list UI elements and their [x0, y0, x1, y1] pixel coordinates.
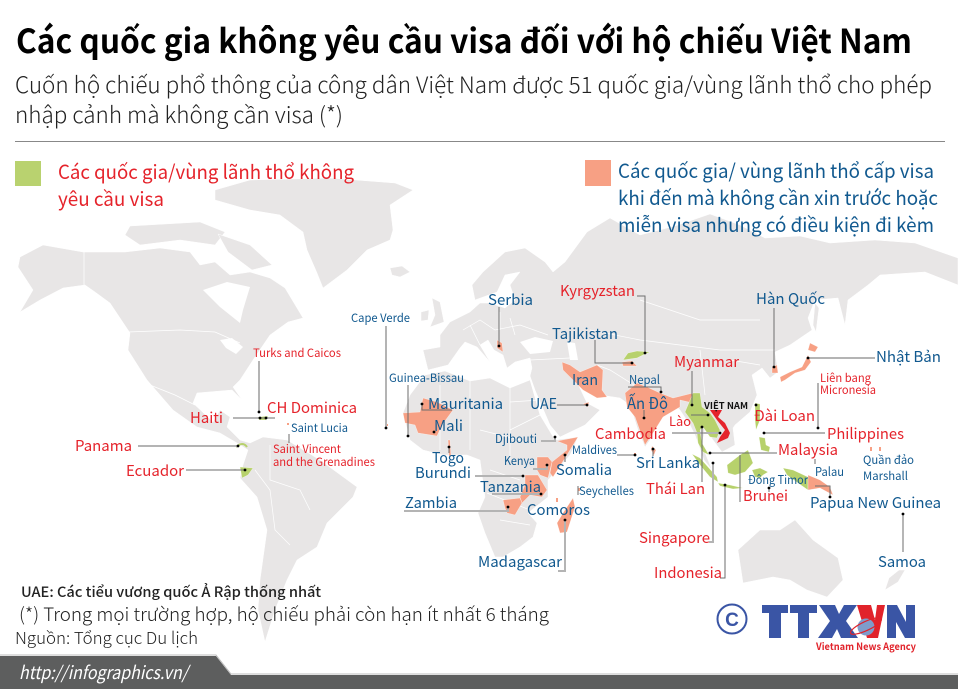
label: Burundi: Burundi: [415, 462, 471, 483]
land: madagascar: [557, 498, 575, 533]
country: south korea: [772, 365, 778, 373]
label: Turks and Caicos: Turks and Caicos: [253, 345, 341, 361]
label: Myanmar: Myanmar: [674, 351, 739, 372]
label: Seychelles: Seychelles: [579, 483, 634, 499]
label: Madagascar: Madagascar: [478, 551, 562, 572]
logo: copyright: C: [725, 610, 739, 631]
label: Togo: Togo: [432, 447, 464, 468]
legend text green: [58, 156, 354, 212]
land: sakhalin: [813, 303, 819, 332]
land: eurasia: [423, 214, 958, 470]
label: Tanzania: Tanzania: [480, 476, 541, 497]
country: sulawesi: [752, 468, 768, 478]
label: Somalia: Somalia: [556, 459, 612, 480]
legend text green: Các quốc gia/vùng lãnh thổ không: [58, 156, 354, 185]
label: Indonesia: Indonesia: [654, 562, 722, 583]
subtitle: [15, 68, 932, 130]
label: Ecuador: Ecuador: [126, 460, 184, 481]
small island states: [287, 423, 881, 502]
country: vietnam: [710, 410, 730, 443]
label: Papua New Guinea: Papua New Guinea: [810, 492, 941, 513]
label: Guinea-Bissau: Guinea-Bissau: [389, 370, 464, 386]
country: papua new guinea: [808, 475, 833, 495]
label: Quần đảo Marshall: Quần đảo: [863, 452, 914, 468]
label: Serbia: Serbia: [488, 289, 533, 310]
label: Saint Vincent and the Grenadines: [273, 441, 375, 470]
country: haiti and dominican republic: [258, 416, 268, 420]
country: somalia: [550, 437, 578, 477]
label: Brunei: Brunei: [743, 485, 788, 506]
country: sumatra: [692, 454, 718, 482]
legend text green: yêu cầu visa: [58, 183, 164, 212]
land: caspian sea: [567, 342, 578, 360]
label: Lào: Lào: [669, 411, 691, 430]
legend swatch green: [15, 161, 41, 186]
land: canadian arctic: [125, 222, 225, 245]
label: Tajikistan: Tajikistan: [552, 323, 618, 344]
label: Haiti: Haiti: [190, 407, 223, 428]
footer band: [0, 655, 958, 689]
country: myanmar laos thailand cambodia: [685, 393, 720, 455]
label: Malaysia: Malaysia: [778, 439, 838, 460]
country: west papua: [783, 468, 808, 490]
label: Mali: Mali: [434, 415, 463, 436]
label: Quần đảo Marshall: [863, 452, 914, 484]
label: Sri Lanka: Sri Lanka: [636, 452, 700, 473]
land: australia: [738, 520, 843, 597]
subtitle: Cuốn hộ chiếu phổ thông của công dân Việt Nam được 51 quốc gia/vùng lãnh thổ cho phép: [15, 68, 932, 100]
country: java: [718, 483, 743, 489]
label: Philippines: Philippines: [827, 423, 904, 444]
land: new zealand: [885, 570, 905, 590]
country: iran: [562, 362, 607, 398]
legend swatch orange: [585, 160, 611, 186]
label: Mauritania: Mauritania: [428, 393, 503, 414]
country: india: [625, 383, 693, 445]
subtitle: nhập cảnh mà không cần visa (*): [15, 98, 343, 130]
title: Các quốc gia không yêu cầu visa đối với hộ chiếu Việt Nam: [16, 15, 912, 63]
label: Djibouti: Djibouti: [495, 430, 537, 447]
label: Liên bang Micronesia: Liên bang: [820, 370, 871, 386]
country: japan: [780, 343, 818, 382]
country borders: [84, 252, 775, 545]
label: Zambia: Zambia: [405, 492, 457, 513]
label: Đài Loan: Đài Loan: [754, 405, 815, 426]
country: mauritania and mali: [403, 398, 453, 436]
label: Liên bang Micronesia: Micronesia: [820, 382, 876, 398]
logo: TTXVN: [762, 605, 916, 653]
label: Thái Lan: Thái Lan: [646, 478, 705, 499]
country: tajikistan: [622, 361, 637, 366]
country: sri lanka: [651, 446, 656, 455]
label: Saint Lucia: Saint Lucia: [291, 420, 348, 436]
label: Cape Verde: Cape Verde: [351, 310, 410, 326]
label: Panama: Panama: [75, 435, 132, 456]
land: great lakes: [220, 338, 243, 354]
land: north and south america: [18, 245, 357, 642]
legend text orange: khi đến mà không cần xin trước hoặc: [618, 182, 938, 211]
world map: [18, 178, 958, 642]
logo: copyright: [718, 604, 746, 634]
country: philippines and taiwan: [755, 403, 770, 452]
legend: orange: [585, 155, 938, 238]
label: Palau: Palau: [815, 463, 844, 480]
country: borneo: [727, 450, 753, 475]
land: africa: [403, 371, 578, 557]
label: Saint Vincent and the Grenadines: and the Grenadines: [273, 454, 375, 470]
label: Nhật Bản: Nhật Bản: [876, 346, 941, 367]
leader lines: [138, 296, 904, 578]
land: black sea: [520, 337, 553, 354]
logo: agency name: Vietnam News Agency: [815, 638, 916, 653]
label: Đông Timor: Đông Timor: [748, 471, 808, 488]
label: Ấn Độ: Ấn Độ: [627, 390, 668, 414]
label: Việt Nam: VIỆT NAM: [703, 399, 748, 412]
country: serbia: [497, 340, 503, 352]
country: kyrgyzstan: [623, 351, 650, 360]
country: togo: [448, 440, 451, 456]
label: Iran: Iran: [572, 369, 598, 390]
label: Samoa: Samoa: [878, 551, 926, 572]
footer url: http://infographics.vn/: [19, 659, 191, 685]
legend: green: [15, 156, 354, 212]
land: greenland: [215, 178, 413, 288]
land: ireland: [421, 310, 429, 321]
country: uae: [583, 402, 589, 407]
country: kenya: [537, 457, 552, 478]
land: britain: [430, 298, 444, 327]
country: panama: [236, 444, 247, 447]
label: Singapore: Singapore: [639, 527, 710, 548]
label: Nepal: Nepal: [629, 371, 660, 388]
country: tanzania: [520, 475, 547, 503]
footnote: (*) Trong mọi trường hợp, hộ chiếu phải còn hạn ít nhất 6 tháng: [19, 601, 549, 627]
label: Saint Vincent and the Grenadines: Saint Vincent: [273, 441, 342, 457]
note: UAE abbreviation: UAE: Các tiểu vương quốc Ả Rập thống nhất: [21, 582, 321, 602]
country: ecuador: [240, 467, 253, 478]
legend text orange: miễn visa nhưng có điều kiện đi kèm: [618, 209, 934, 238]
legend text orange: Các quốc gia/ vùng lãnh thổ cấp visa: [618, 155, 934, 184]
label: Maldives: Maldives: [572, 442, 617, 458]
country: zambia: [503, 498, 522, 515]
label: Cambodia: Cambodia: [595, 423, 666, 444]
label: Kyrgyzstan: Kyrgyzstan: [560, 280, 635, 301]
label: Hàn Quốc: Hàn Quốc: [756, 288, 825, 309]
land: baffin island: [218, 234, 272, 270]
legend text orange: [618, 155, 938, 238]
label: Comoros: Comoros: [527, 499, 590, 520]
land: iceland: [390, 266, 410, 277]
label: Kenya: Kenya: [504, 452, 535, 469]
label: Quần đảo Marshall: Marshall: [863, 468, 908, 484]
label: Liên bang Micronesia: [820, 370, 876, 398]
label: CH Dominica: CH Dominica: [267, 397, 357, 418]
label: UAE: UAE: [530, 393, 557, 414]
source: Nguồn: Tổng cục Du lịch: [15, 625, 198, 649]
map labels: [75, 280, 941, 583]
land: hudson bay: [203, 282, 250, 323]
